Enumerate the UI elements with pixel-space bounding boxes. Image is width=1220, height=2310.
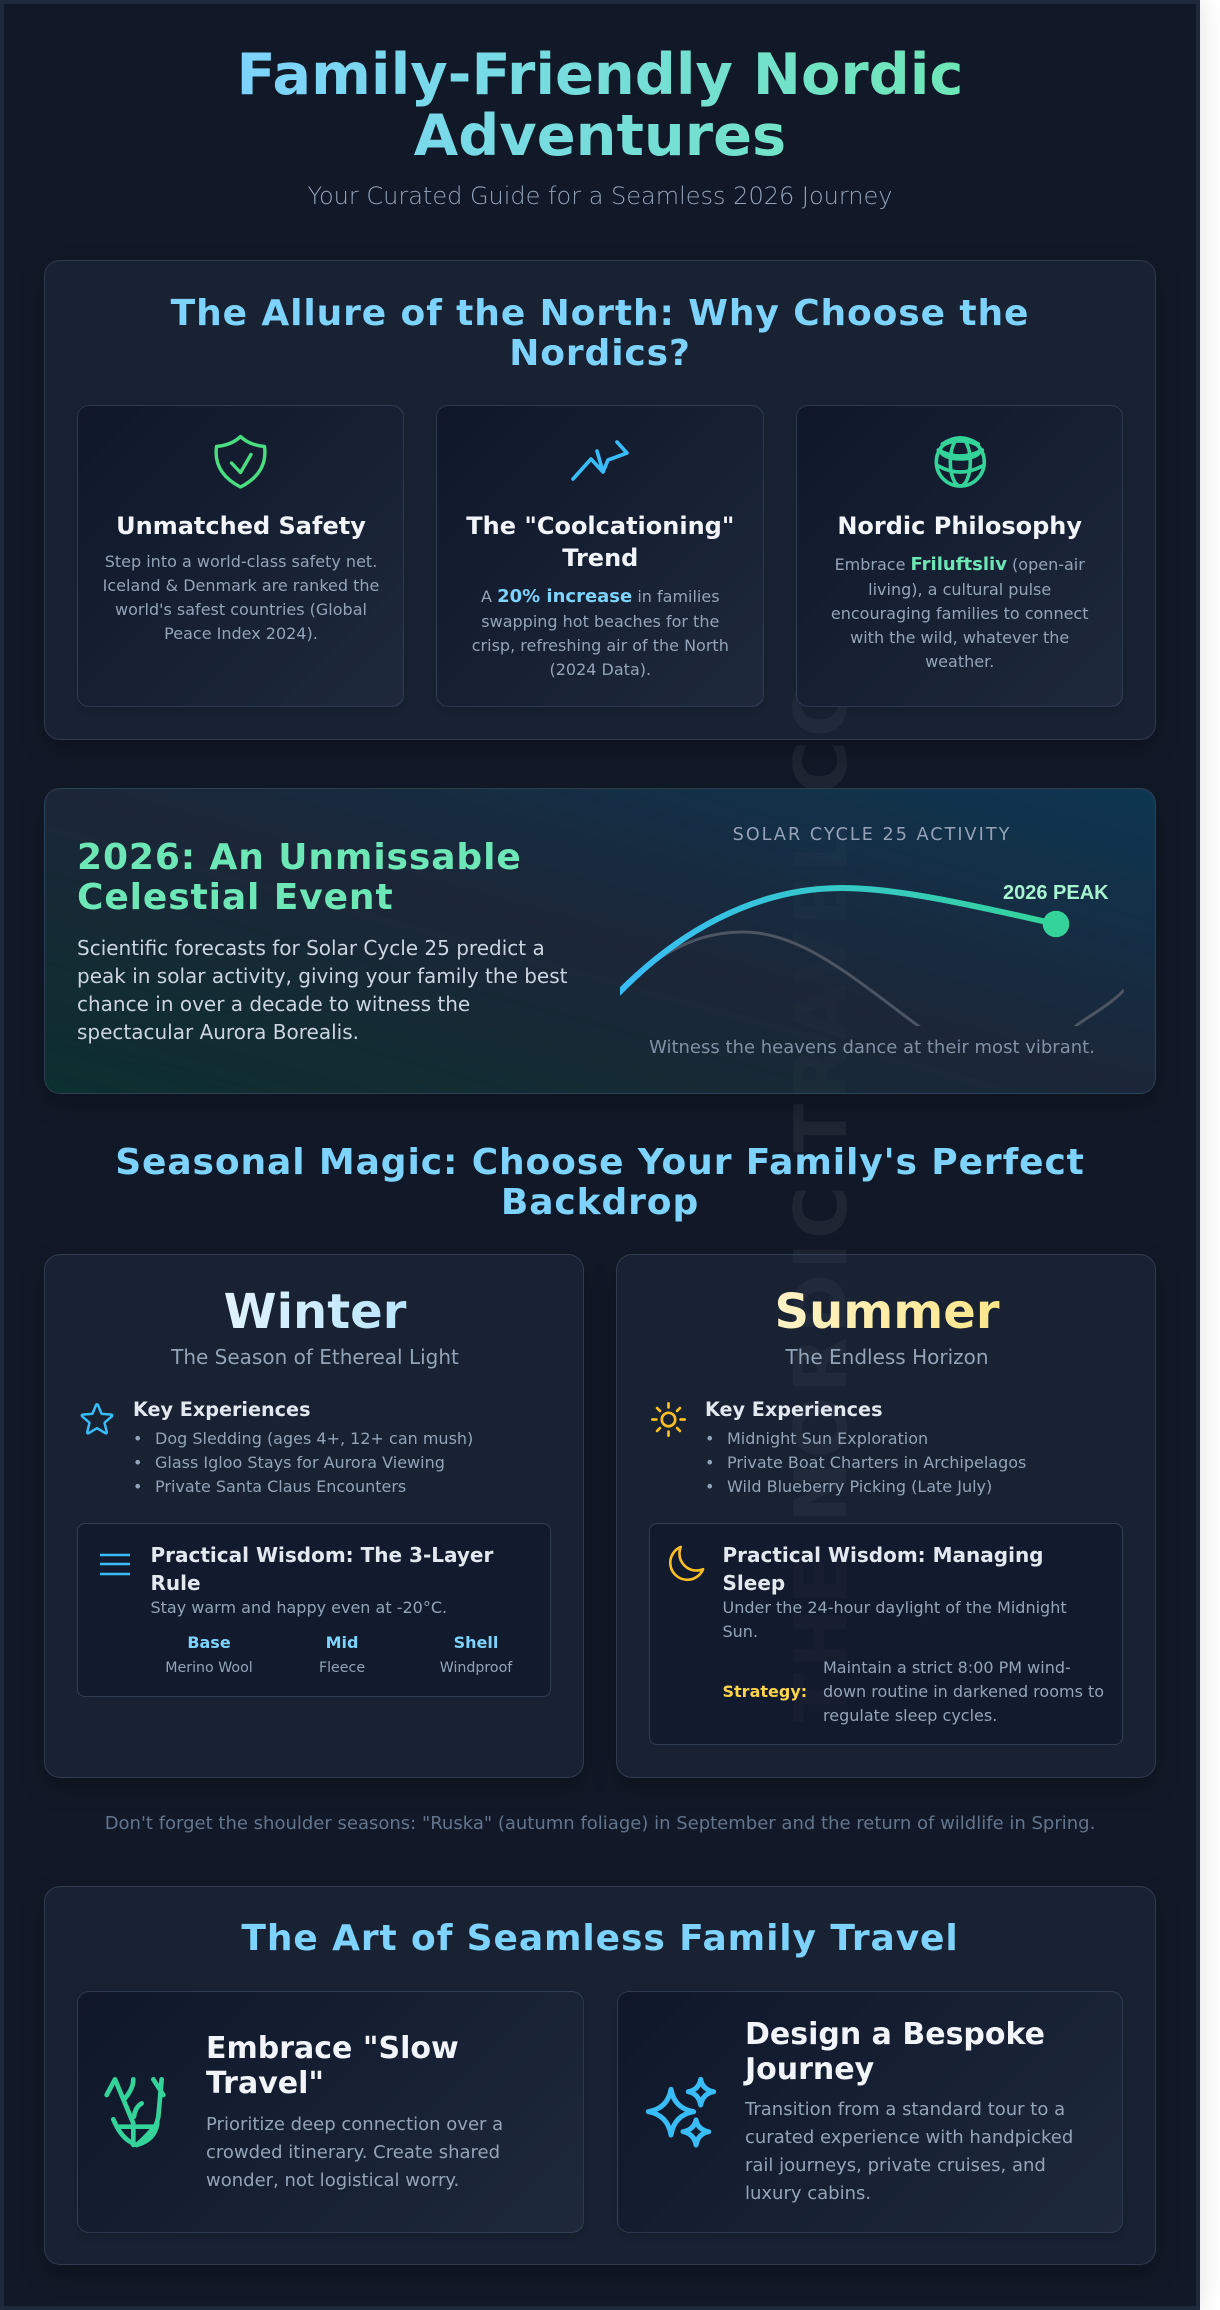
box text	[722, 1598, 1067, 1641]
list: •	[705, 1429, 714, 1448]
card text	[103, 552, 379, 642]
heading: 2026 event	[77, 837, 522, 918]
icon: globe	[934, 436, 986, 488]
card text: world's safest countries (Global	[115, 600, 367, 618]
shoulder seasons note: Don't forget the shoulder seasons: "Ruska" (autumn foliage) in September and the return of wildlife in Spring.	[105, 1813, 1095, 1834]
icon: moon	[668, 1546, 704, 1582]
list: Dog Sledding (ages 4+, 12+ can mush)	[155, 1429, 473, 1448]
subtitle: Your Curated Guide for a Seamless 2026 Journey	[308, 182, 892, 210]
panel: the allure of the north	[44, 260, 1156, 740]
peak marker	[1043, 911, 1069, 937]
layer: shell: Windproof	[440, 1660, 512, 1676]
box title: Practical Wisdom: The 3-Layer	[150, 1543, 493, 1567]
card text: swapping hot beaches for the	[481, 612, 719, 631]
box text: Sun.	[722, 1622, 758, 1641]
icon: sparkles	[646, 2076, 716, 2148]
card text: (2024 Data).	[550, 660, 651, 679]
list	[133, 1429, 473, 1496]
card text	[206, 2114, 503, 2191]
card: coolcationing trend	[436, 405, 764, 707]
box text: Under the 24-hour daylight of the Midnight	[722, 1598, 1067, 1617]
box text: Stay warm and happy even at -20°C.	[150, 1598, 447, 1617]
text: forecast: Scientific forecasts for Solar Cycle 25 predict a	[77, 936, 545, 960]
list: Midnight Sun Exploration	[727, 1429, 928, 1448]
box: managing sleep	[649, 1523, 1123, 1745]
list: Private Santa Claus Encounters	[155, 1477, 406, 1496]
title	[237, 44, 963, 166]
chart label: SOLAR CYCLE 25 ACTIVITY	[733, 825, 1011, 845]
heading: 2026 event: Celestial Event	[77, 877, 394, 918]
card text: with the wild, whatever the	[850, 628, 1069, 647]
text: forecast: chance in over a decade to witness the	[77, 992, 470, 1016]
strategy label: Strategy:	[722, 1682, 807, 1701]
chart: solar cycle curve	[620, 882, 1124, 1026]
card text	[472, 586, 729, 679]
card title: Trend	[562, 544, 638, 572]
icon: shield check	[214, 434, 267, 489]
key experiences	[705, 1398, 1026, 1496]
layer: shell: Shell	[454, 1633, 498, 1652]
strategy text: Maintain a strict 8:00 PM wind-	[823, 1658, 1071, 1677]
layer: mid	[319, 1633, 365, 1676]
card title	[466, 512, 734, 572]
list: •	[133, 1477, 142, 1496]
icon: trend line	[571, 440, 629, 481]
box title	[150, 1543, 494, 1595]
strategy text: regulate sleep cycles.	[823, 1706, 997, 1725]
text: forecast: spectacular Aurora Borealis.	[77, 1020, 359, 1044]
peak label: 2026 PEAK	[1003, 882, 1109, 904]
card title: Unmatched Safety	[116, 512, 366, 540]
box title: Sleep	[722, 1571, 785, 1595]
card text: curated experience with handpicked	[745, 2127, 1073, 2148]
season title: winter: Winter	[224, 1284, 406, 1340]
panel: 2026 celestial event	[44, 788, 1156, 1094]
card title	[206, 2030, 459, 2101]
panel: seamless family travel	[44, 1886, 1156, 2265]
card text: Peace Index 2024).	[164, 624, 318, 642]
card text: Embrace Friluftsliv (open-air	[835, 554, 1085, 575]
card: slow travel	[77, 1991, 584, 2233]
subheading: Key Experiences	[133, 1398, 310, 1421]
box: 3-layer rule	[77, 1523, 551, 1697]
card text: Iceland & Denmark are ranked the	[103, 576, 379, 594]
list: Glass Igloo Stays for Aurora Viewing	[155, 1453, 445, 1472]
layer: shell	[440, 1633, 512, 1676]
box title: Rule	[150, 1571, 201, 1595]
list: •	[133, 1453, 142, 1472]
card text: crisp, refreshing air of the North	[472, 636, 729, 655]
card: nordic philosophy	[796, 405, 1123, 707]
card text	[744, 2099, 1073, 2204]
card text: wonder, not logistical worry.	[206, 2170, 459, 2191]
heading: seamless travel: The Art of Seamless Family Travel	[241, 1918, 959, 1959]
card: unmatched safety	[77, 405, 404, 707]
card text: A 20% increase in families	[481, 586, 720, 607]
watermark: vertical text: THE NORDIC TRAVEL CO	[779, 672, 863, 1722]
heading: seasonal magic	[115, 1142, 1085, 1223]
heading: allure	[170, 293, 1029, 374]
list	[705, 1429, 1026, 1496]
heading: seasonal magic: Seasonal Magic: Choose Your Family's Perfect	[115, 1142, 1085, 1183]
card text: luxury cabins.	[745, 2183, 871, 2204]
text: forecast	[77, 936, 568, 1044]
box title: Practical Wisdom: Managing	[722, 1543, 1044, 1567]
layer: base: Base	[187, 1633, 231, 1652]
title: Family-Friendly Nordic	[237, 41, 963, 108]
layer: base	[165, 1633, 253, 1676]
activity line	[610, 888, 1056, 1002]
card text: crowded itinerary. Create shared	[206, 2142, 500, 2163]
panel: summer	[616, 1254, 1156, 1778]
list: •	[705, 1477, 714, 1496]
strategy text	[823, 1658, 1104, 1725]
card: bespoke journey	[617, 1991, 1123, 2233]
strategy text: down routine in darkened rooms to	[823, 1682, 1104, 1701]
heading: seasonal magic: Backdrop	[501, 1182, 699, 1223]
layer: base: Merino Wool	[165, 1660, 253, 1676]
heading: 2026 event: 2026: An Unmissable	[77, 837, 522, 878]
heading: allure: Nordics?	[509, 332, 691, 374]
card title: Journey	[745, 2052, 874, 2087]
previous cycle line	[620, 932, 1124, 1051]
card title: Embrace "Slow	[206, 2030, 459, 2066]
icon: sun	[651, 1402, 686, 1437]
title: Adventures	[414, 102, 786, 169]
subheading: Key Experiences	[705, 1398, 882, 1421]
panel: winter	[44, 1254, 584, 1778]
season subtitle: The Endless Horizon	[785, 1345, 989, 1369]
card text: living), a cultural pulse	[868, 580, 1051, 599]
card text: Transition from a standard tour to a	[745, 2099, 1065, 2120]
card title	[743, 2016, 1045, 2087]
icon: star	[80, 1403, 114, 1435]
card text	[831, 554, 1089, 671]
season title: summer: Summer	[774, 1284, 1000, 1340]
list: Wild Blueberry Picking (Late July)	[727, 1477, 992, 1496]
icon: layers	[100, 1554, 130, 1576]
season subtitle: The Season of Ethereal Light	[171, 1345, 459, 1369]
card title: Design a Bespoke	[745, 2016, 1045, 2052]
card title: The "Coolcationing"	[466, 512, 734, 540]
card text: rail journeys, private cruises, and	[745, 2155, 1046, 2176]
list: Private Boat Charters in Archipelagos	[727, 1453, 1026, 1472]
heading: allure: The Allure of the North: Why Choose the	[171, 293, 1029, 334]
layer: mid: Mid	[326, 1633, 358, 1652]
box title	[722, 1543, 1044, 1595]
key experiences	[133, 1398, 473, 1496]
layer: mid: Fleece	[319, 1660, 365, 1676]
card title: Nordic Philosophy	[837, 512, 1082, 540]
text: forecast: peak in solar activity, giving your family the best	[77, 964, 568, 988]
card text: weather.	[925, 652, 994, 671]
chart caption: Witness the heavens dance at their most vibrant.	[649, 1037, 1095, 1058]
list: •	[133, 1429, 142, 1448]
card text: Step into a world-class safety net.	[105, 552, 377, 570]
card text: Prioritize deep connection over a	[206, 2114, 503, 2135]
card title: Travel"	[206, 2066, 324, 2101]
icon: slow travel sprout	[104, 2077, 166, 2148]
list: •	[705, 1453, 714, 1472]
card text: encouraging families to connect	[831, 604, 1089, 623]
